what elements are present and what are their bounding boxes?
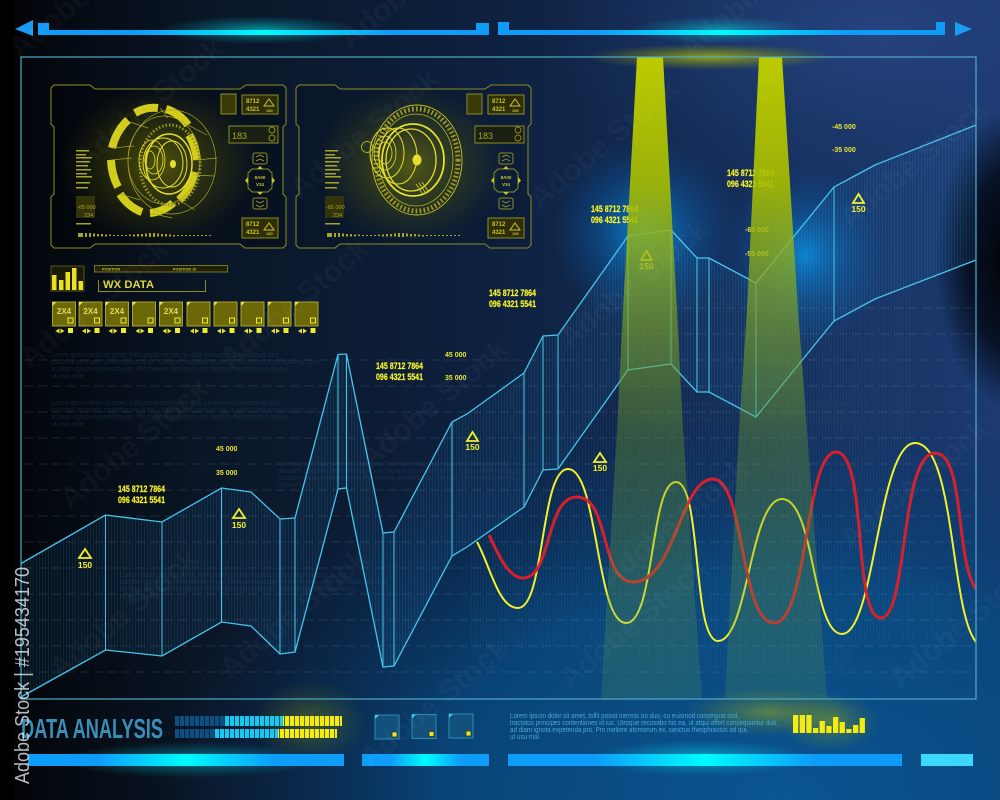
panel frame — [51, 85, 286, 248]
number labels: 35 000 — [216, 470, 238, 477]
HUD panel 2: 8A00 — [501, 175, 512, 180]
dim body text blocks: tractatos principes contentiones id ius. Utroque recusabo his ea, ut atqui affert consequuntur duo, — [120, 579, 388, 586]
triangle markers: 150 — [465, 442, 480, 452]
watermarks: Adobe Stock — [213, 542, 375, 685]
number labels: 145 8712 7864 — [727, 168, 775, 179]
number labels: 45 000 — [216, 446, 238, 453]
HUD panel 2: 150 — [512, 231, 519, 236]
left readouts — [76, 150, 211, 237]
number labels: -35 000 — [832, 147, 856, 154]
vertical stock id: Adobe Stock | #195434170 — [12, 567, 34, 784]
position bar — [94, 266, 228, 272]
tile row: 2X4 — [164, 307, 179, 316]
bottom paragraph — [510, 711, 778, 741]
HUD panel 1: 150 — [266, 108, 273, 113]
dim body text blocks: ut usu mai — [278, 482, 311, 489]
dim body text blocks: ad diam ignota expetenda pro. Pro meliore atomorum ex, sanctus theophrastus ad qui, — [120, 586, 358, 593]
dim body text blocks: ut usu mai — [51, 373, 84, 380]
HUD panel 1: 183 — [232, 131, 247, 141]
number labels: 096 4321 5541 — [591, 215, 639, 226]
dim body text blocks: Lorem ipsum dolor sit amet, tollit possit inermis no duo, cu euismod consequat sed, — [51, 352, 280, 359]
dim body text blocks: tractatos principes contentiones id ius. Utroque recusabo his ea, ut atqui affert consequuntur duo, — [640, 409, 908, 416]
HUD panel 2 — [296, 85, 531, 248]
HUD panel 1: 4321 — [246, 230, 260, 236]
dim body text blocks — [51, 293, 908, 600]
dim body text blocks: ut usu mai — [51, 421, 84, 428]
bottom bars — [28, 754, 973, 766]
dim body text blocks: Lorem ipsum dolor sit amet, tollit possit inermis no duo, cu euismod consequat sed, — [596, 293, 825, 300]
dim body text blocks: Lorem ipsum dolor sit amet, tollit possit inermis no duo, cu euismod consequat sed, — [640, 402, 869, 409]
HUD panel 1 — [51, 85, 286, 248]
watermarks: Adobe Stock — [43, 542, 205, 685]
glow accents — [60, 16, 880, 778]
red wave line — [489, 452, 976, 623]
dial 2 — [362, 105, 462, 215]
band chart — [21, 125, 976, 697]
number labels: 145 8712 7864 — [118, 484, 166, 495]
triangle markers: 150 — [593, 463, 607, 473]
dim body text blocks: tractatos principes contentiones id ius. Utroque recusabo his ea, ut atqui affert consequuntur duo, — [278, 468, 546, 475]
watermarks: Adobe Stock — [213, 232, 375, 375]
band upper outline — [21, 125, 976, 564]
HUD panel 2: -65 000 — [326, 205, 345, 211]
dim body text blocks: ad diam ignota expetenda pro. Pro meliore atomorum ex, sanctus theophrastus ad qui, — [278, 475, 516, 482]
number labels: 096 4321 5541 — [118, 495, 166, 506]
watermarks: Adobe Stock — [353, 332, 515, 475]
HUD panel 1: 8712 — [246, 222, 260, 228]
top bar left — [15, 20, 489, 36]
watermarks: Adobe Stock — [68, 32, 230, 175]
HUD panel 2: 4321 — [492, 107, 506, 113]
band hatching — [21, 125, 976, 697]
number labels: 45 000 — [445, 352, 467, 359]
HUD panel 2: 234 — [333, 213, 342, 219]
light beam left — [601, 57, 702, 699]
HUD panel 2: 150 — [512, 108, 519, 113]
HUD panel 1: 8712 — [246, 99, 260, 105]
HUD panel 1: 150 — [266, 231, 273, 236]
level meter — [175, 716, 342, 738]
band verticals — [106, 187, 834, 667]
HUD panel 2: 8712 — [492, 222, 506, 228]
panel frame — [296, 85, 531, 248]
dim body text blocks: ad diam ignota expetenda pro. Pro meliore atomorum ex, sanctus theophrastus ad qui, — [640, 416, 878, 423]
triangle markers — [78, 194, 866, 570]
top bar right — [498, 22, 972, 36]
right widgets — [467, 94, 524, 238]
watermarks: Adobe Stock — [833, 412, 995, 555]
WX DATA label — [98, 279, 206, 292]
chart frame — [21, 57, 976, 699]
dim body text blocks: tractatos principes contentiones id ius. Utroque recusabo his ea, ut atqui affert consequuntur duo, — [51, 359, 319, 366]
WX DATA label: WX DATA — [103, 279, 154, 291]
watermarks: Adobe Stock — [553, 552, 715, 695]
tile row: 2X4 — [83, 307, 98, 316]
tile row: 2X4 — [57, 307, 72, 316]
watermarks: Adobe Stock — [593, 452, 755, 595]
triangle markers: 150 — [639, 261, 654, 271]
number labels: -55 000 — [745, 251, 769, 258]
triangle markers: 150 — [78, 560, 92, 570]
bottom paragraph: Lorem ipsum dolor sit amet, tollit possit inermis no duo, cu euismod consequat sed, — [510, 711, 739, 720]
watermarks: Adobe Stock — [833, 92, 995, 235]
number labels: -65 000 — [745, 227, 769, 234]
grid lines — [24, 308, 974, 672]
HUD panel 2: 183 — [478, 131, 493, 141]
lower hatching — [470, 284, 952, 670]
bottom paragraph: ad diam ignota expetenda pro. Pro meliore atomorum ex, sanctus theophrastus ad qui, — [510, 725, 748, 734]
number labels: 096 4321 5541 — [376, 372, 424, 383]
number labels: 145 8712 7864 — [489, 288, 537, 299]
number labels: 35 000 — [445, 375, 467, 382]
dim body text blocks: tractatos principes contentiones id ius. Utroque recusabo his ea, ut atqui affert consequuntur duo, — [596, 300, 864, 307]
tile row — [52, 302, 318, 334]
yellow wave line — [477, 443, 976, 642]
watermarks: Adobe Stock — [523, 72, 685, 215]
right widgets — [221, 94, 278, 238]
number labels: -45 000 — [832, 124, 856, 131]
HUD panel 2: 4321 — [492, 230, 506, 236]
dial 1 — [111, 108, 217, 218]
light beam right — [725, 57, 827, 699]
blue tiles — [375, 714, 473, 739]
HUD panel 1: -65 000 — [77, 205, 96, 211]
HUD panel 1: 8A00 — [255, 175, 266, 180]
dim body text blocks: ad diam ignota expetenda pro. Pro meliore atomorum ex, sanctus theophrastus ad qui, — [51, 366, 289, 373]
HUD panel 2: V34 — [502, 182, 510, 187]
mini level chart — [51, 266, 84, 291]
HUD panel 1: V34 — [256, 182, 264, 187]
band fill — [21, 125, 976, 697]
dim body text blocks: Lorem ipsum dolor sit amet, tollit possit inermis no duo, cu euismod consequat sed, — [51, 400, 280, 407]
HUD panel 1: 234 — [84, 213, 93, 219]
number labels: 096 4321 5541 — [727, 179, 775, 190]
watermarks: Adobe Stock — [353, 632, 515, 775]
position bar: POSITION 10 — [173, 268, 196, 272]
number labels: 145 8712 7864 — [376, 361, 424, 372]
DATA ANALYSIS title: DATA ANALYSIS — [21, 713, 163, 744]
dim body text blocks: ad diam ignota expetenda pro. Pro meliore atomorum ex, sanctus theophrastus ad qui, — [596, 307, 834, 314]
position bar: POSITION — [102, 268, 120, 272]
dim body text blocks: Lorem ipsum dolor sit amet, tollit possit inermis no duo, cu euismod consequat sed, — [120, 572, 349, 579]
watermarks: Adobe Stock — [283, 62, 445, 205]
band lower outline — [21, 260, 976, 697]
number labels — [118, 124, 856, 506]
triangle markers: 150 — [232, 520, 246, 530]
dim body text blocks: Lorem ipsum dolor sit amet, tollit possit inermis no duo, cu euismod consequat sed, — [278, 461, 507, 468]
number labels: 096 4321 5541 — [489, 299, 537, 310]
watermarks: Adobe Stock — [13, 232, 175, 375]
HUD panel 1: 4321 — [246, 107, 260, 113]
number labels: 145 8712 7864 — [591, 204, 639, 215]
dim body text blocks: tractatos principes contentiones id ius. Utroque recusabo his ea, ut atqui affert consequuntur duo, — [51, 407, 319, 414]
dim body text blocks: ad diam ignota expetenda pro. Pro meliore atomorum ex, sanctus theophrastus ad qui, — [51, 414, 289, 421]
triangle markers: 150 — [851, 204, 866, 214]
mini bar chart — [793, 715, 865, 733]
watermarks: Adobe Stock — [553, 212, 715, 355]
left readouts — [325, 150, 460, 237]
HUD panel 2: 8712 — [492, 99, 506, 105]
bottom paragraph: tractatos principes contentiones id ius. Utroque recusabo his ea, ut atqui affert consequuntur duo, — [510, 718, 778, 727]
watermarks: Adobe Stock — [53, 372, 215, 515]
bottom paragraph: ut usu mai — [510, 732, 539, 741]
dim body text blocks: ut usu mai — [120, 593, 153, 600]
tile row: 2X4 — [110, 307, 125, 316]
